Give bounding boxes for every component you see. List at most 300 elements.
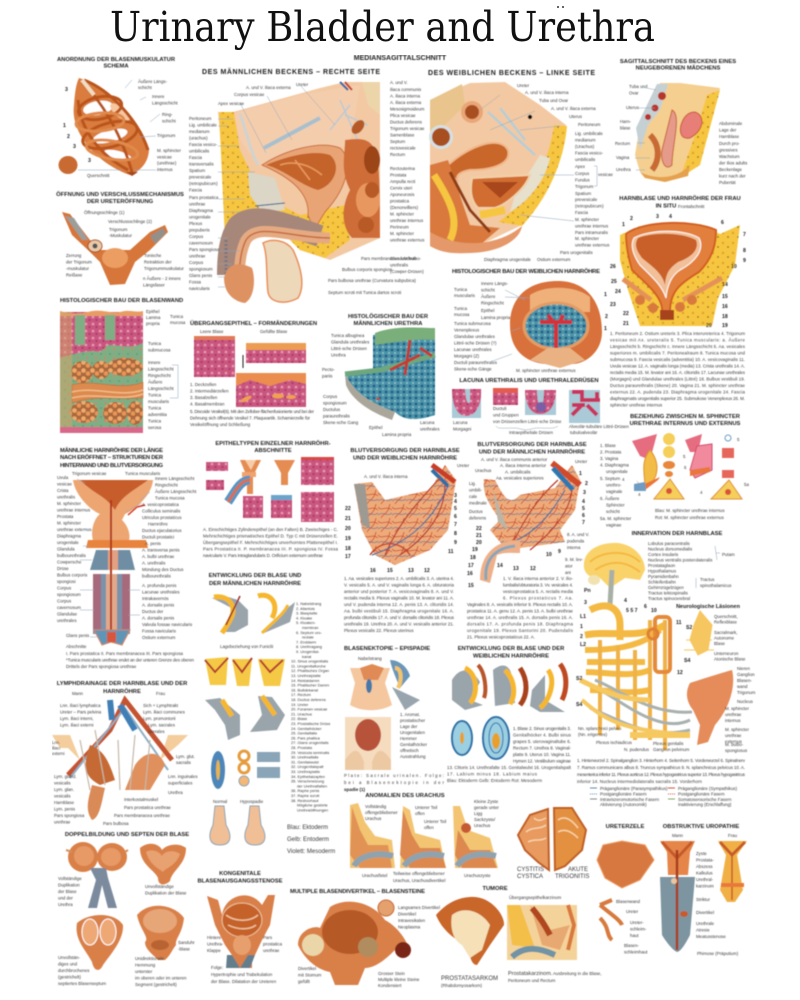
panel: histology of bladder wall: Längsschicht <box>148 366 174 372</box>
panel: central labels: A. iliaca externa <box>390 100 422 105</box>
panel: female pelvis sagittal section: vesicae <box>598 172 613 177</box>
panel: transitional epithelium: Dehnung sich öffnende Vesikel 7. Plaqueartik. Schamierzelle für <box>190 416 311 420</box>
panel: urachus anomalies: offen <box>424 825 434 830</box>
panel: innervation of the bladder: 1 <box>580 624 583 630</box>
panel: innervation of the bladder: Nucleus ventralis posterolateralis <box>648 558 713 562</box>
panel: multiple diverticula: Grosser Stein <box>378 971 405 976</box>
panel: innervation of the bladder: (Nn. erigentes) <box>578 732 608 737</box>
panel: exstrophy: bei a Blasenektopie in der <box>344 780 445 785</box>
panel: blood supply bladder and female urethra <box>344 448 470 633</box>
panel: lymph drainage: Lym. iliaci externi <box>60 722 94 728</box>
text: in situ legend <box>610 331 746 408</box>
panel: blood supply male urethra <box>467 442 589 640</box>
panel: male urethra longitudinal: Diaphragma <box>57 534 81 538</box>
illustration: brain <box>584 543 645 605</box>
heading: exstrophy: BLASENEKTOPIE – EPISPADIE <box>344 646 430 652</box>
panel: male urethra longitudinal: A. penis <box>145 541 162 546</box>
panel: blood supply male urethra: 19 <box>472 547 478 553</box>
panel: histology male urethra: Littré-sche Drüsen <box>331 346 367 351</box>
panel: female bladder and urethra in situ: 16 <box>722 304 728 310</box>
panel: blood supply male urethra: 22 <box>476 526 482 532</box>
panel: male urethra longitudinal: A. dorsalis penis <box>142 616 175 620</box>
text: in situ legend: submucosa 9. Fascia vesicalis (adventitia) 10. A. vesicovaginalis 11. <box>610 357 745 362</box>
panel: innervation of the bladder: L1 <box>580 614 586 620</box>
text: female vessel legend: 1. Aa. vesicales superiores 2. A. umbilicalis 3. A. uterina 4. <box>344 576 454 581</box>
heading: in situ: HARNBLASE UND HARNRÖHRE DER FRAU <box>619 196 741 202</box>
heading: muscle arrangement: ANORDNUNG DER BLASENMUSKULATUR <box>57 57 175 63</box>
panel: male urethra longitudinal: Prostata <box>57 514 74 519</box>
panel: female pelvis sagittal section: Ostium externum <box>537 257 571 262</box>
panel: blood supply bladder and female urethra: 16 <box>370 568 376 574</box>
title: Urinary Bladder and Urethra <box>110 3 655 51</box>
panel: male urethra longitudinal: Innere Längsschicht <box>155 476 194 481</box>
panel: ureter opening mechanism: Reißaxe <box>66 272 83 278</box>
panel: transitional epithelium: 3. Basalzellen <box>190 395 218 400</box>
panel: obstructive uropathy: Striktur <box>696 897 710 902</box>
panel: innervation of the bladder: Hypothalamus <box>648 568 677 574</box>
illustration: septate bladder <box>77 915 123 970</box>
illustration: male urethra <box>73 480 153 645</box>
panel: obstructive uropathy: Zyste <box>696 851 707 856</box>
heading: male development: DER MÄNNLICHEN HARNRÖHRE <box>209 580 301 587</box>
illustration: urachus figures <box>350 803 498 868</box>
panel: histology female urethra: Skene-sche Gänge <box>454 366 492 372</box>
panel: lymph drainage: Lym. penis <box>54 806 76 812</box>
panel: duplication and septa: und der <box>58 896 73 900</box>
illustration: prostate sarcoma <box>436 897 504 965</box>
panel: lacuna urethralis and glands: und Gruppen <box>493 412 519 418</box>
illustration: complete duplication <box>66 842 128 908</box>
panel: duplication and septa: im oberen oder im unteren <box>135 976 187 980</box>
text: in situ legend: (Morgagni) und Glandulae urethrales (Littré) 18. Bulbus vestibuli 19. <box>610 376 745 382</box>
panel: blood supply male urethra: 6 <box>582 513 585 519</box>
panel: blood supply bladder and female urethra: 22 <box>345 506 351 512</box>
panel: histology male urethra: Tunica albuginea <box>331 333 365 338</box>
panel: innervation of the bladder: Pn <box>584 588 591 594</box>
panel: female pelvis sagittal section: urethrae externus <box>575 242 610 248</box>
illustration: incomplete duplication <box>140 844 186 884</box>
labels: cystitis: AKUTE <box>568 867 588 873</box>
panel: innervation of the bladder: M. bulbo- <box>725 742 743 747</box>
illustration: filled bladder epithelium <box>236 343 306 407</box>
panel: blood supply male urethra: cale <box>469 494 478 499</box>
heading: lymph drainage: HARNRÖHRE <box>103 688 141 695</box>
panel: blood supply bladder and female urethra: 18 <box>345 546 351 552</box>
heading: female blood supply: UND DER WEIBLICHEN HARNRÖHRE <box>353 454 457 462</box>
panel: female pelvis sagittal section: (Urachus) <box>575 144 595 149</box>
panel: female bladder and urethra in situ: 22 <box>623 311 629 317</box>
heading: tumors: TUMORE <box>482 886 508 892</box>
panel: male pelvis sagittal section: Fossa <box>189 280 202 284</box>
panel: histology male urethra: Lacuna <box>420 420 434 425</box>
panel: sphincter relation: 4 <box>622 477 625 482</box>
heading: ureter opening: DER URETERÖFFNUNG <box>87 198 154 205</box>
panel: blood supply male urethra: 14 <box>497 563 503 569</box>
text: development legend: 18. Ductus deferens <box>291 697 326 702</box>
panel: female bladder and urethra in situ: 6 <box>721 220 724 226</box>
panel: male urethra longitudinal: Glandulae <box>57 612 78 616</box>
panel: male urethra longitudinal: A. dorsalis penis <box>142 602 175 608</box>
panel: blood supply male urethra: 21 <box>476 533 482 539</box>
panel: lymph drainage: urethrae <box>54 820 71 824</box>
panel: innervation of the bladder: Atonische Blase <box>714 656 746 662</box>
text: development legend: 9. Urogenital- <box>296 649 320 654</box>
panel: obstructive uropathy: Abszess <box>696 864 713 869</box>
panel: innervation of the bladder: 6 <box>644 604 647 610</box>
illustration: ureterocele <box>597 841 654 888</box>
text: male vessel legend: Vaginales 8. A. vesicalis inferior 9. Plexus rectalis 10. A. <box>467 602 573 607</box>
panel: central labels: A. und V. <box>390 80 408 85</box>
panel: epithelium types: Mehrschichtiges prismatisches Epithel D. Typ C mit Drüsenzellen E. <box>203 534 338 538</box>
panel: obstructive uropathy: Kalkulus <box>696 870 713 876</box>
panel: female pelvis sagittal section: Fundus <box>575 178 590 182</box>
panel: innervation of the bladder: 1. Hinterwurzel 2. Spinalganglion 3. Hinterhorn 4. Seitenhorn 5. Vorderwurzel 6. Spinalnerv <box>577 758 746 763</box>
panel: lymph drainage: laterales <box>148 729 165 734</box>
panel: urachus anomalies: Sackzyste/ <box>474 817 496 822</box>
panel: tumors: Übergangsepithelkarzinom <box>509 895 562 900</box>
panel: tumors <box>436 886 602 988</box>
panel: cystitis <box>517 808 589 880</box>
panel: histology male urethra: paraurethralis <box>323 414 351 418</box>
panel: duplication and septa: Hemmung <box>135 962 156 968</box>
text: female vessel legend: V. vesicalis 5. A. und V. vaginalis longa 6. A. obturatoria <box>344 582 455 588</box>
panel: ureterocele: schleim- <box>630 926 647 932</box>
panel: ureter opening mechanism: Trigonum <box>109 227 127 232</box>
panel: innervation of the bladder: Schleifenbahn <box>648 580 676 584</box>
illustration: female embryo <box>452 664 566 759</box>
panel: duplication and septa: septiertes Blasenseptum <box>58 981 106 986</box>
heading: muscle arrangement: SCHEMA <box>103 64 129 70</box>
illustration: newborn pelvis <box>635 83 720 182</box>
panel: female pelvis sagittal section: Fascia <box>575 210 588 215</box>
legend: nerve fibers: Somatosensorische Fasern <box>678 797 732 802</box>
illustration: ureter shapes <box>600 900 622 940</box>
panel: female pelvis sagittal section: umbilicalis <box>575 157 596 162</box>
panel: female bladder and urethra in situ: 24 <box>615 289 621 295</box>
panel: histology of bladder wall: Lamina <box>146 315 161 320</box>
panel: lacuna urethralis and glands: Ductuli <box>493 406 506 411</box>
panel: innervation of the bladder: 12 <box>677 670 683 676</box>
panel: newborn pelvis section: Rectum <box>615 141 630 146</box>
panel: legend column near sphincter: urogenitale <box>606 469 628 474</box>
illustration: lacuna blocks <box>452 388 600 423</box>
panel: legend column near sphincter: 3. Vagina <box>600 456 619 461</box>
heading: neurological lesions: Neurologische Läsionen <box>676 604 741 610</box>
panel: innervation of the bladder: Prostataglaon <box>648 563 676 568</box>
panel: innervation of the bladder: 11 <box>676 620 682 626</box>
text: in situ legend: sphincter urethrae internus <box>610 402 663 408</box>
panel: male pelvis sagittal section <box>189 82 417 303</box>
panel: histology female urethra: muscularis <box>454 293 476 298</box>
panel: multiple diverticula: Kondensiert <box>378 983 402 988</box>
panel: multiple diverticula: Multiple kleine Steine <box>378 977 420 982</box>
panel: male urethra longitudinal: Ductus der <box>142 609 164 614</box>
panel: exstrophy: offnetisch <box>400 748 419 753</box>
panel: female bladder and urethra in situ: 21 <box>623 321 629 327</box>
legend: nerve fibers <box>590 786 738 807</box>
panel: sphincter relation: Blau: M. sphincter urethrae internus <box>655 508 725 513</box>
panel: blood supply male urethra: 1 <box>579 471 582 477</box>
panel: urachus anomalies: Urachus, Urachusdivertikel <box>393 878 445 883</box>
panel: male urethra longitudinal: Ringschicht <box>155 482 178 488</box>
text: development legend: 20. Foramen vesicae <box>291 707 327 712</box>
text: development legend: 38. Restvorhaut <box>291 798 319 803</box>
panel: male urethra longitudinal: Cowpersche <box>57 560 82 564</box>
panel: male urethra longitudinal: Mündung des Ductus <box>142 567 184 572</box>
heading: male blood supply: UND DER MÄNNLICHEN HARNRÖHRE <box>479 448 585 456</box>
panel: male urethra longitudinal: urogenitale <box>57 540 79 545</box>
panel: male urethra longitudinal: Lacunae urethrales <box>142 590 180 594</box>
panel: innervation of the bladder: 4 <box>624 598 627 604</box>
panel: blood supply bladder and female urethra: 15 <box>387 568 393 574</box>
text: male vessel legend: urogenitale 19. Plexus Santorini 20. Pudendalis <box>467 628 574 633</box>
panel: innervation of the bladder: Reflexblase <box>714 620 737 624</box>
illustration: female uropathy <box>718 841 747 902</box>
panel: sphincter relation <box>622 414 749 520</box>
panel: newborn pelvis section: Vagina <box>616 155 630 160</box>
panel: newborn pelvis section: der Ilios adults <box>719 160 748 166</box>
panel: innervation of the bladder: Nucleus <box>737 699 754 704</box>
panel: histology male urethra: Pecto- <box>322 367 335 372</box>
panel: obstructive uropathy <box>660 824 747 956</box>
panel: innervation of the bladder <box>576 531 756 807</box>
text: development legend: membran <box>302 625 318 630</box>
panel: male urethra longitudinal: Drüse <box>57 566 69 571</box>
text: development legend: 19. Ureter <box>291 702 309 707</box>
panel: male urethra longitudinal: cavernosum <box>57 605 81 610</box>
panel: male urethra longitudinal: Glandula <box>57 546 75 552</box>
panel: development of male bladder and urethra: Blau: Ektoderm <box>287 825 328 831</box>
text: development legend: 31. Genitalwulst <box>291 759 320 764</box>
panel: ureterocele <box>597 824 654 954</box>
panel: exstrophy: spadie (1) <box>344 787 366 792</box>
panel: urachus anomalies: gerade unter <box>474 805 499 810</box>
panel: histology female urethra: schicht <box>481 288 495 292</box>
panel: histology of bladder wall: Innere <box>148 360 160 365</box>
panel: urachus anomalies: Teilweise offengebliebener <box>393 871 445 876</box>
panel: urachus anomalies: Vollständig <box>365 804 386 809</box>
panel: lymph drainage: sacralis <box>176 760 192 765</box>
panel: newborn pelvis section: blase <box>620 126 631 130</box>
panel: male urethra longitudinal: urethrales <box>57 618 77 623</box>
panel: multiple diverticula <box>290 889 440 988</box>
panel: exstrophy: Ausstrahlung <box>400 754 426 759</box>
text: in situ legend: Uvula vesicae 12. A. vaginalis longa (media) 13. Crista urethralis 14. A. <box>610 364 745 368</box>
panel: female bladder and urethra in situ: 23 <box>610 302 616 308</box>
text: development legend: Mögliche gestörte <box>297 803 328 808</box>
panel: male urethra longitudinal: *Tunica muscularis urethrae endet an der unteren Grenze des oberen <box>66 658 195 662</box>
text: female vessel legend: rectalis media 9. Plexus vaginalis 10. M. levator ani 11. A. <box>344 596 454 600</box>
panel: histology male urethra: Skene-sche Gang <box>323 420 359 425</box>
panel: newborn pelvis section: Uterus <box>626 105 640 110</box>
panel: central labels: urethralis <box>390 262 409 268</box>
heading: development female: ENTWICKLUNG DER BLASE UND DER <box>458 646 564 652</box>
panel: lymph drainage: Pars membranacea urethrae <box>114 813 170 818</box>
panel: female pelvis sagittal section: Corpus <box>575 171 590 176</box>
legend: nerve fibers: Aktivierung (Autonomik) <box>600 802 647 807</box>
panel: lymph drainage: Interkostalmuskel <box>124 797 158 802</box>
text: development legend: 23. Prostatische Drüse <box>291 721 330 726</box>
icon: cross-section <box>58 156 78 174</box>
panel: male urethra longitudinal: vesicae <box>57 482 72 486</box>
panel: male urethra longitudinal: HINTERWAND UND BLUTVERSORGUNG <box>60 463 163 469</box>
illustration: stenosis <box>207 895 275 968</box>
panel: innervation of the bladder: Nieren <box>737 666 750 671</box>
panel: legend column near sphincter: 4. Diaphragma <box>600 462 629 468</box>
panel: male urethra longitudinal: urethrae internus <box>57 508 91 512</box>
panel: urachus anomalies: Urachus <box>365 816 382 821</box>
panel: ureterocele: Ureter- <box>630 920 644 925</box>
labels: cystitis: CYSTICA <box>517 874 543 880</box>
illustration: innervation bladder <box>687 670 733 745</box>
panel: newborn pelvis section: Harn- <box>620 119 631 124</box>
panel: innervation of the bladder: Ganglion pelvinum <box>653 747 690 752</box>
panel: duplication and septa <box>58 832 195 987</box>
panel: ureter opening mechanism: -muskulatur <box>66 266 89 271</box>
panel: female bladder and urethra in situ: Frontalschnitt <box>678 204 705 209</box>
panel: histology female urethra: Lamina propria <box>481 315 511 320</box>
panel: central labels: M. sphincter <box>390 231 414 236</box>
panel: lymph drainage: Lnn. <box>52 740 60 745</box>
label: prostate carcinoma <box>508 971 602 983</box>
panel: central labels: (Cowper-Drüsen) <box>390 269 424 274</box>
heading: transitional epithelium: ÜBERGANGSEPITHEL – FORMÄNDERUNGEN <box>190 320 317 327</box>
text: development legend: rectale <box>302 635 314 640</box>
legend: nerve fibers: Intraviszeromotorische Fasern <box>600 797 660 802</box>
panel: newborn pelvis section: Lage der <box>719 128 737 132</box>
panel: urachus anomalies: Urachus <box>474 823 491 828</box>
panel: female pelvis sagittal section: M. sphincter <box>575 217 599 222</box>
panel: sphincter relation: 6 <box>684 465 687 470</box>
panel: bladder muscle arrangement: (urethrae) <box>157 161 177 166</box>
panel: female bladder and urethra in situ: 2 <box>630 216 633 222</box>
panel: female pelvis sagittal section: (retropubicum) <box>575 204 604 208</box>
panel: blood supply bladder and female urethra: 3 <box>454 493 457 499</box>
panel: blood supply bladder and female urethra: 13 <box>408 568 414 574</box>
illustration: normal and hypospadias <box>210 806 265 845</box>
panel: central labels: (Denonvilliers) <box>390 205 419 210</box>
labels: cystitis <box>517 867 589 880</box>
panel: male pelvis sagittal section: Fascia <box>189 188 202 192</box>
panel: male pelvis sagittal section: Septum scroti mit Tunica dartos scroti <box>328 290 401 295</box>
heading: in situ: IN SITU <box>656 204 676 210</box>
legend: nerve fibers: Inaktivierung (Erschlaffung) <box>678 802 732 807</box>
panel: lymph drainage: superficiales <box>168 780 193 786</box>
panel: duplication and septa: durchbrochenes <box>58 968 90 973</box>
panel: histology male urethra <box>322 313 440 437</box>
panel: lymph drainage: Sich + Lymphtrakt <box>143 703 178 708</box>
panel: male pelvis sagittal section: umbilicalis <box>189 148 210 154</box>
panel: development of male bladder and urethra: Lagebeziehung von Funiclii <box>220 644 273 649</box>
panel: transitional epithelium: Gefüllte Blase <box>260 329 288 334</box>
panel: central labels: Trigonum vesicae <box>390 126 425 131</box>
panel: female pelvis sagittal section: prevesicale <box>575 197 598 202</box>
panel: histology female urethra: Ductuli paraurethrales <box>454 360 498 365</box>
text: male vessel legend: prostatica 11. A. genu 12. A. penis 13. A. bulbi urethrae <box>467 608 574 614</box>
panel: blood supply bladder and female urethra: 19 <box>345 536 351 542</box>
illustration: embryo sections <box>205 595 295 789</box>
panel: innervation of the bladder: spongiosus <box>725 748 748 753</box>
text: male vessel legend: vesicoprostatica 5. A. rectalis media <box>503 589 574 594</box>
panel: blood supply male urethra: deferens <box>469 516 487 520</box>
panel: blood supply male urethra: 13 <box>513 566 519 572</box>
panel: histology female urethra: Tunica submucosa <box>454 321 491 326</box>
labels: cystitis: TRIGONITIS <box>555 874 589 880</box>
panel: duplication and septa: Unidirektionale <box>135 956 164 961</box>
panel: blood supply male urethra: interna <box>567 545 581 550</box>
panel: lymph drainage: Lym. iliaci communes <box>143 710 186 714</box>
panel: congenital outlet stenosis: Pars <box>263 935 272 940</box>
panel: ureter opening mechanism: Zerrung <box>66 253 81 258</box>
panel: female bladder and urethra in situ: 25 <box>611 279 617 285</box>
panel: ureter opening mechanism: der Trigonum <box>66 260 92 264</box>
panel: female pelvis sagittal section: Pars urogenitalis <box>560 250 594 255</box>
panel: male pelvis sagittal section: Ureter <box>296 82 309 87</box>
panel: male urethra longitudinal: Ductuli prostatici <box>142 534 174 540</box>
panel: female pelvis sagittal section: Lig. umbilicale <box>575 131 603 136</box>
heading: innervation: INNERVATION DER HARNBLASE <box>632 531 723 537</box>
panel: innervation of the bladder: externus <box>725 739 743 744</box>
panel: development female: Rectum 7. Urethra 8. Vaginal- <box>513 746 572 750</box>
panel: development female: Genitalhöcker 4. Bulbi sinus <box>513 732 572 738</box>
panel: male urethra longitudinal: A. transversa penis <box>142 548 180 552</box>
panel: urachus anomalies: offen <box>415 811 425 816</box>
panel: bladder muscle arrangement: schicht <box>162 118 176 124</box>
panel: innervation of the bladder: S2 <box>576 676 582 682</box>
panel: male urethra longitudinal: A. urethralis <box>142 560 166 566</box>
illustration: sphincters left <box>632 433 684 499</box>
panel: bladder muscle arrangement: Ring- <box>162 112 172 117</box>
panel: blood supply male urethra: 5 <box>582 506 585 512</box>
panel: male pelvis sagittal section: Bulbus corporis spongiosi <box>342 267 392 272</box>
panel: male pelvis sagittal section: Spatium <box>189 168 205 173</box>
panel: histology of bladder wall: propria <box>146 321 160 326</box>
panel: duplication and septa: diges und <box>58 962 78 966</box>
panel: lymph drainage: externi <box>52 751 65 756</box>
panel: obstructive uropathy: Prostata- <box>696 858 714 862</box>
heading: male pelvis: DES MÄNNLICHEN BECKENS – RECHTE SEITE <box>202 68 380 76</box>
panel: bladder muscle arrangement: Längsschicht <box>152 100 178 106</box>
panel: multiple diverticula: Neoplasma <box>398 924 421 930</box>
text: development legend: 6. Septum uro- <box>296 630 322 635</box>
panel: urachus anomalies: Urachusfistel <box>362 873 387 878</box>
panel: histology of bladder wall: Längsschicht <box>148 386 174 391</box>
panel: bladder muscle arrangement: 3 <box>65 87 68 93</box>
panel: newborn pelvis section: Durch pro- <box>719 141 740 146</box>
illustration: lymph vessels <box>52 700 188 820</box>
heading: development female: WEIBLICHEN HARNRÖHRE <box>473 652 549 660</box>
panel: innervation of the bladder: S4 <box>576 702 582 708</box>
panel: male pelvis sagittal section: cavernosum <box>189 240 213 246</box>
panel: histology female urethra: Ringschicht <box>481 300 504 306</box>
panel: central labels: Perineum <box>390 224 409 230</box>
heading: male blood supply: BLUTVERSORGUNG DER HARNBLASE <box>477 442 587 448</box>
panel: female bladder and urethra in situ: 20 <box>706 323 712 329</box>
panel: blood supply male urethra: ani <box>565 570 571 575</box>
panel: legend column near sphincter <box>600 443 632 528</box>
panel: exstrophy: Plate: Sacrale urinalen. Folge: <box>344 773 444 778</box>
text: development legend: 32. Urogenitalspalt <box>291 764 324 769</box>
panel: female bladder and urethra in situ: 7 <box>743 232 746 238</box>
panel: urachus anomalies: Ligg <box>474 811 483 816</box>
panel: legend column near sphincter: 1. Blase <box>600 443 616 448</box>
panel: female bladder and urethra in situ: 26 <box>610 264 616 270</box>
panel: lymph drainage: Pars prostatica urethrae <box>124 805 171 810</box>
panel: lymph drainage: vesicalis <box>54 794 71 798</box>
panel: lacuna urethralis and glands <box>452 377 629 435</box>
panel: lymph drainage: Lym. glut. <box>176 754 195 759</box>
panel: sphincter relation: 4 <box>638 492 641 497</box>
